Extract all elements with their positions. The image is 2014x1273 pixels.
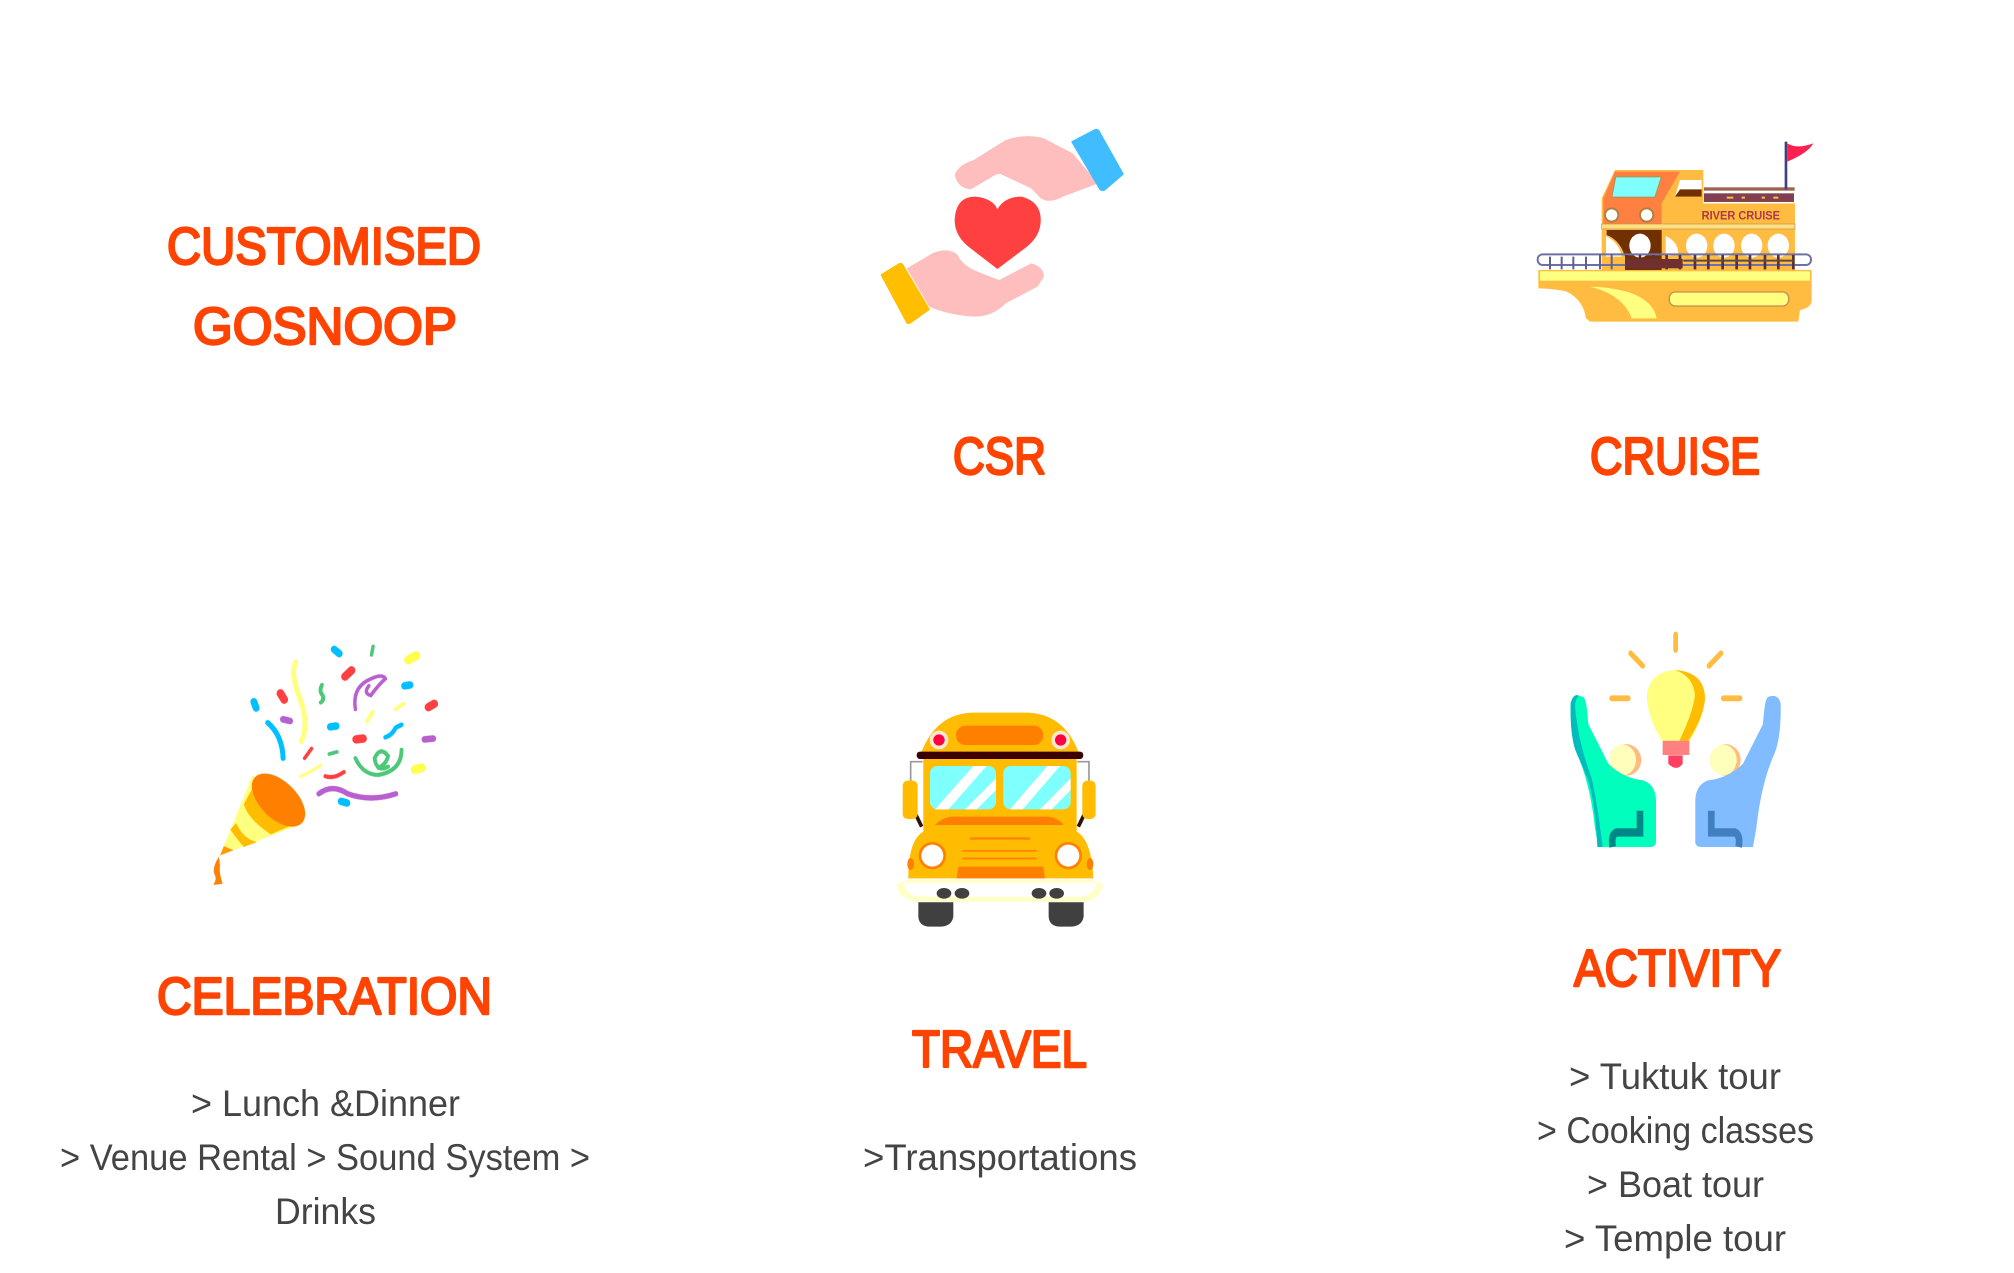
icon: two people and light bulb [1571, 635, 1781, 847]
heading: activity: ACTIVITY [1574, 940, 1781, 998]
panel: customised gosnoop [167, 218, 481, 356]
heading: customised: CUSTOMISED [167, 218, 481, 276]
text: transportations: >Transportations [863, 1137, 1137, 1178]
panel: celebration [60, 646, 590, 1232]
heading: cruise: CRUISE [1590, 428, 1760, 486]
heading: travel: TRAVEL [912, 1021, 1087, 1079]
list: activity options: > Tuktuk tour [1569, 1056, 1781, 1097]
list: activity options [1537, 1056, 1814, 1259]
list: activity options: > Cooking classes [1537, 1110, 1814, 1151]
list: celebration services [60, 1083, 590, 1232]
icon: hands holding heart [883, 131, 1120, 323]
list: celebration services: Drinks [275, 1191, 376, 1232]
panel: cruise [1538, 142, 1813, 486]
heading: celebration: CELEBRATION [157, 968, 492, 1026]
panel: travel [863, 713, 1137, 1178]
icon: river cruise boat [1538, 142, 1813, 322]
list: celebration services: > Venue Rental > Sound System > [60, 1137, 590, 1178]
panel: activity [1537, 635, 1814, 1259]
list: celebration services: > Lunch &Dinner [191, 1083, 460, 1124]
heading: csr: CSR [953, 428, 1046, 486]
heading: gosnoop: GOSNOOP [193, 298, 457, 356]
list: activity options: > Boat tour [1587, 1164, 1764, 1205]
list: activity options: > Temple tour [1564, 1218, 1786, 1259]
icon: yellow bus [896, 713, 1103, 927]
label: river cruise: RIVER CRUISE [1702, 209, 1780, 223]
icon: party popper [213, 646, 434, 885]
panel: csr [883, 131, 1120, 486]
